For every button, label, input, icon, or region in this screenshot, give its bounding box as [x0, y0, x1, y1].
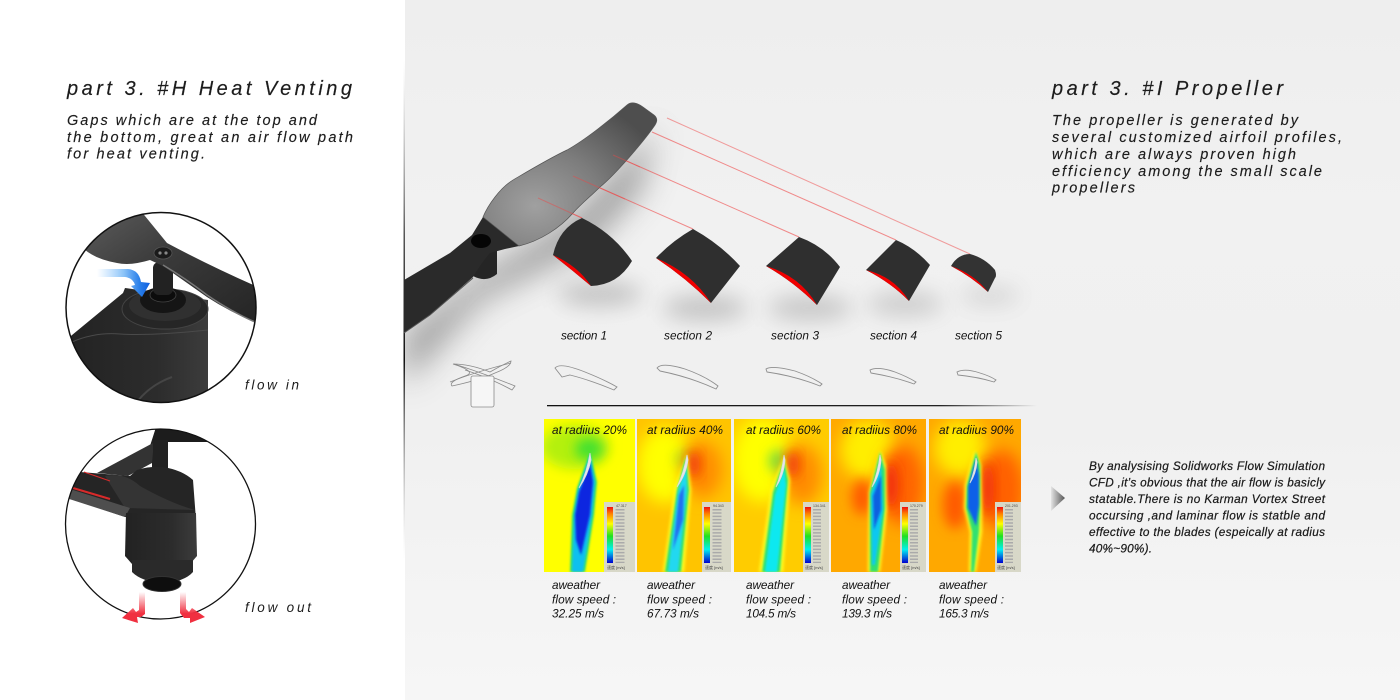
arrow: air flow out left	[122, 592, 145, 623]
text block: heat venting description: Gaps which are at the top and	[67, 113, 318, 129]
text block: CFD analysis: statable.There is no Karman Vortex Street	[1089, 492, 1326, 506]
legend 40%: 速度 [m/s]	[705, 564, 723, 570]
propeller	[404, 103, 657, 333]
flow speed: 104.5: flow speed :	[746, 592, 811, 606]
flow speed: 67.73	[647, 578, 712, 620]
legend 80%: 速度 [m/s]	[902, 564, 920, 570]
legend 90%: 201.293	[1005, 504, 1018, 508]
flow speed: 165.3: 165.3 m/s	[939, 606, 989, 620]
CFD panel: radius 90%: at radiius 90%	[939, 423, 1014, 437]
circle: flow in detail	[65, 212, 257, 404]
CFD panel: radius 40%	[637, 419, 731, 572]
motor tower	[125, 513, 197, 564]
flow speed: 67.73: aweather	[647, 578, 696, 592]
circle: flow out detail	[64, 428, 256, 623]
section labels: section 1	[561, 328, 607, 342]
red section lines	[538, 118, 970, 254]
text block: heat venting description: for heat venting.	[67, 146, 205, 162]
text block: propeller description: The propeller is generated by	[1052, 113, 1299, 129]
CFD panel: radius 80%: at radiius 80%	[842, 423, 917, 437]
flow speed: 139.3: 139.3 m/s	[842, 606, 892, 620]
icon: arrow to CFD analysis	[1051, 486, 1065, 511]
motor shaft	[473, 250, 497, 279]
text block: CFD analysis: 40%~90%).	[1089, 542, 1152, 556]
upper strut	[97, 443, 153, 476]
legend 60%: 速度 [m/s]	[805, 564, 823, 570]
section labels: section 3	[771, 328, 819, 342]
flow speed: 104.5: 104.5 m/s	[746, 606, 796, 620]
bottom ring	[143, 576, 181, 592]
legend 40%	[702, 502, 731, 572]
text block: propeller description: propellers	[1051, 180, 1135, 196]
motor collar	[122, 287, 208, 329]
text block: propeller description: which are always proven high	[1052, 147, 1296, 163]
flow speed: 104.5: aweather	[746, 578, 795, 592]
text block: CFD analysis: By analysising Solidworks Flow Simulation	[1089, 459, 1325, 473]
legend 80%	[900, 502, 926, 572]
text block: heat venting description	[67, 113, 353, 162]
airfoil section 5	[951, 254, 996, 292]
legend 60%: 134.341	[813, 504, 826, 508]
heading: heat venting: part 3. #H Heat Venting	[66, 78, 352, 100]
wireframe propeller icon	[450, 361, 515, 407]
text block: CFD analysis: occursing ,and laminar flow is statble and	[1089, 508, 1325, 522]
CFD panel: radius 20%	[541, 419, 635, 572]
CFD panel: radius 90%	[929, 419, 1024, 572]
section labels: section 2	[664, 328, 712, 342]
label: flow in: flow in	[245, 378, 299, 392]
legend 90%: 速度 [m/s]	[997, 564, 1015, 570]
right grey panel	[405, 0, 1400, 700]
divider line	[547, 405, 1037, 406]
airfoil section 4	[866, 240, 930, 301]
flow speed: 165.3: aweather	[939, 578, 988, 592]
text block: CFD analysis: CFD ,it’s obvious that the air flow is basicly	[1089, 476, 1326, 490]
airfoil section 2	[656, 229, 740, 303]
CFD panel: radius 80%	[831, 419, 926, 572]
CFD panel: radius 20%: at radiius 20%	[552, 423, 627, 437]
flow speed: 67.73: flow speed :	[647, 592, 712, 606]
text block: CFD analysis	[1089, 459, 1326, 556]
legend 20%	[604, 502, 635, 572]
propeller hub	[404, 217, 519, 333]
red section lines over blade	[538, 155, 640, 218]
propeller blade surface	[483, 103, 657, 246]
text block: heat venting description: the bottom, great an air flow path	[67, 130, 353, 146]
legend 20%: 47.317	[616, 504, 627, 508]
top blade	[150, 430, 207, 444]
flow speed: 139.3	[842, 578, 907, 620]
shaft	[153, 262, 173, 295]
airfoil outlines	[555, 365, 996, 390]
airfoil section 3	[766, 237, 840, 305]
section labels: section 4	[870, 328, 917, 342]
legend 80%: 170.279	[910, 504, 923, 508]
legend 60%	[803, 502, 829, 572]
legend 40%: 94.343	[713, 504, 724, 508]
flow speed: 104.5	[746, 578, 811, 620]
text block: CFD analysis: effective to the blades (espeically at radius	[1089, 525, 1325, 539]
legend 90%	[995, 502, 1021, 572]
airfoil section 1	[553, 218, 632, 286]
flow speed: 32.25: 32.25 m/s	[552, 606, 604, 620]
flow speed: 32.25	[552, 578, 616, 620]
text block: propeller description: several customized airfoil profiles,	[1052, 130, 1342, 146]
flow speed: 139.3: aweather	[842, 578, 891, 592]
section labels	[561, 328, 1002, 342]
propeller blade	[86, 214, 256, 321]
flow speed: 165.3: flow speed :	[939, 592, 1004, 606]
arrow: air flow in	[97, 269, 150, 297]
heading: propeller: part 3. #I Propeller	[1051, 78, 1284, 100]
text block: propeller description: efficiency among the small scale	[1052, 164, 1322, 180]
hub screw	[154, 247, 172, 259]
left white panel	[0, 0, 405, 700]
CFD panel: radius 40%: at radiius 40%	[647, 423, 723, 437]
arrow: air flow out right	[180, 592, 205, 623]
shaft	[152, 440, 168, 468]
CFD panel: radius 60%: at radiius 60%	[746, 423, 821, 437]
drone arm	[72, 467, 196, 518]
flow speed: 67.73: 67.73 m/s	[647, 606, 699, 620]
flow speed: 32.25: flow speed :	[552, 592, 616, 606]
flow speed: 139.3: flow speed :	[842, 592, 907, 606]
red arm stripes	[73, 472, 110, 499]
drone body	[60, 288, 208, 405]
text block: propeller description	[1051, 113, 1342, 196]
section labels: section 5	[955, 328, 1002, 342]
legend 20%: 速度 [m/s]	[607, 564, 625, 570]
flow speed: 165.3	[939, 578, 1004, 620]
flow speed: 32.25: aweather	[552, 578, 601, 592]
label: flow out: flow out	[245, 600, 312, 615]
CFD panel: radius 60%	[732, 418, 829, 572]
shadows under propeller	[404, 130, 1020, 385]
lower collar	[132, 560, 193, 580]
